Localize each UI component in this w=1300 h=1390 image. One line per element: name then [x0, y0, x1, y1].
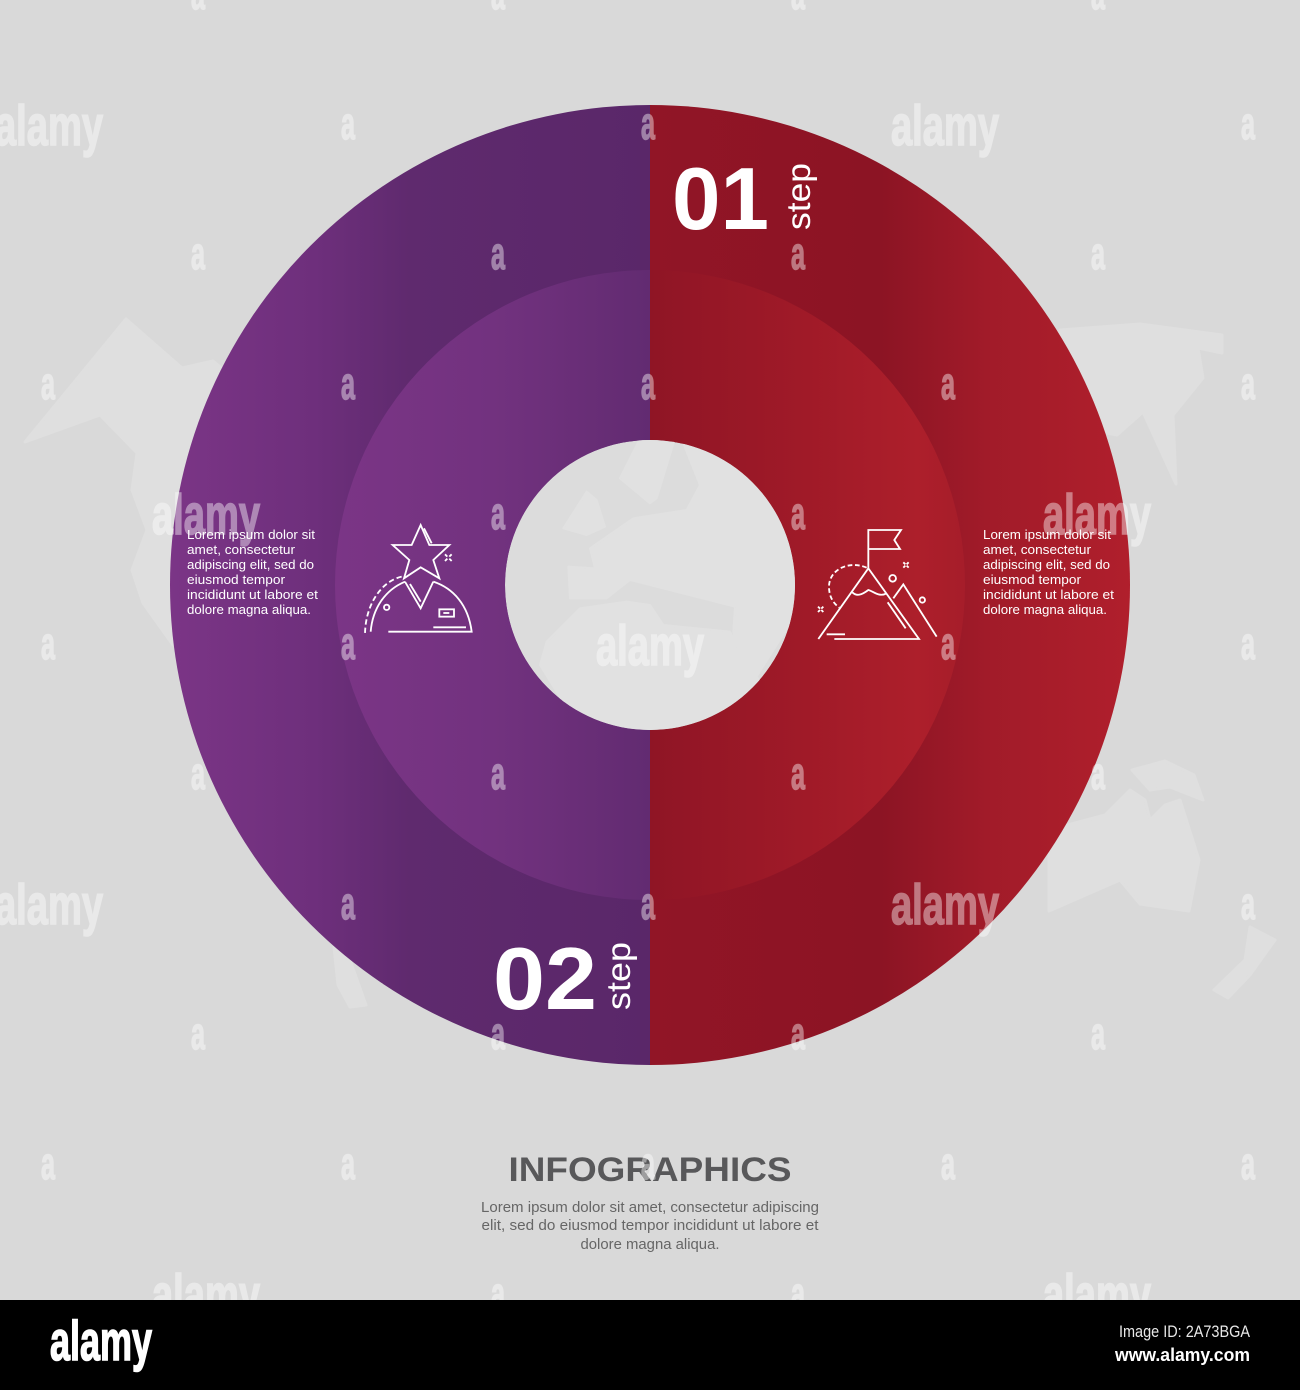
- watermark: small a marks: a: [191, 1008, 206, 1059]
- icon: star on dome: [365, 525, 472, 635]
- watermark: small a marks: a: [341, 1138, 356, 1189]
- segment 02: purple outer ring: [170, 105, 650, 1065]
- donut chart: [170, 105, 1130, 1065]
- watermark: small a marks: a: [791, 1268, 806, 1319]
- watermark: small a marks: a: [341, 618, 356, 669]
- watermark: large alamy marks: alamy: [891, 873, 999, 937]
- watermark: small a marks: a: [191, 748, 206, 799]
- text block: step 01: incididunt ut labore et: [983, 587, 1114, 602]
- footer url: www.alamy.com: [1114, 1345, 1250, 1365]
- watermark: small a marks: a: [641, 358, 656, 409]
- segment 01: red inner ring: [650, 270, 965, 900]
- text block: step 01: Lorem ipsum dolor sit: [983, 527, 1111, 542]
- watermark: large alamy marks: alamy: [152, 483, 260, 547]
- watermark: small a marks: a: [941, 358, 956, 409]
- text block: step 01: [983, 527, 1114, 617]
- description: [481, 1200, 819, 1253]
- watermark: large alamy marks: alamy: [1043, 483, 1151, 547]
- number 02: 02: [493, 929, 597, 1028]
- watermark: small a marks: a: [341, 358, 356, 409]
- description: dolore magna aliqua.: [580, 1237, 720, 1253]
- title: INFOGRAPHICS: [508, 1151, 792, 1189]
- watermark: small a marks: a: [491, 1268, 506, 1319]
- watermark: small a marks: a: [1241, 618, 1256, 669]
- watermark: small a marks: a: [1091, 1008, 1106, 1059]
- segment 01: red outer ring: [650, 105, 1130, 1065]
- text block: step 02: [187, 527, 318, 617]
- text block: step 01: adipiscing elit, sed do: [983, 557, 1110, 572]
- centre hole with map: [505, 435, 800, 735]
- text block: step 02: dolore magna aliqua.: [187, 602, 311, 617]
- segment 02: purple inner ring: [335, 270, 650, 900]
- watermark: small a marks: a: [1091, 228, 1106, 279]
- text block: step 02: amet, consectetur: [187, 542, 296, 557]
- watermark: large alamy marks: alamy: [1043, 1263, 1151, 1327]
- watermark: small a marks: a: [1241, 98, 1256, 149]
- watermark: small a marks: a: [1091, 748, 1106, 799]
- description: Lorem ipsum dolor sit amet, consectetur adipiscing: [481, 1200, 819, 1216]
- watermark: small a marks: a: [491, 228, 506, 279]
- word step: step: [780, 163, 817, 230]
- text block: step 01: amet, consectetur: [983, 542, 1092, 557]
- watermark: large alamy marks: alamy: [596, 614, 704, 678]
- text block: step 02: incididunt ut labore et: [187, 587, 318, 602]
- watermark: small a marks: a: [791, 748, 806, 799]
- watermark: small a marks: a: [491, 488, 506, 539]
- watermark: large alamy marks: [0, 94, 1151, 1327]
- text block: step 02: adipiscing elit, sed do: [187, 557, 314, 572]
- icon: mountain with flag: [818, 530, 937, 639]
- description: elit, sed do eiusmod tempor incididunt ut labore et: [482, 1218, 818, 1234]
- watermark: small a marks: a: [1241, 358, 1256, 409]
- watermark: small a marks: a: [1241, 878, 1256, 929]
- text block: step 02: eiusmod tempor: [187, 572, 286, 587]
- world map backdrop: [25, 319, 1275, 1007]
- watermark: small a marks: a: [491, 748, 506, 799]
- text block: step 02: Lorem ipsum dolor sit: [187, 527, 315, 542]
- text block: step 01: eiusmod tempor: [983, 572, 1082, 587]
- number 01: 01: [672, 149, 769, 248]
- footer logo: alamy: [50, 1309, 152, 1372]
- watermark: large alamy marks: alamy: [152, 1263, 260, 1327]
- watermark: small a marks: a: [641, 878, 656, 929]
- watermark: small a marks: a: [191, 228, 206, 279]
- watermark: small a marks: a: [941, 1138, 956, 1189]
- watermark: small a marks: a: [491, 1008, 506, 1059]
- word step: step: [600, 942, 637, 1010]
- footer image id: Image ID: 2A73BGA: [1119, 1322, 1251, 1341]
- watermark: small a marks: a: [791, 488, 806, 539]
- watermark: small a marks: a: [941, 618, 956, 669]
- watermark: small a marks: a: [41, 1138, 56, 1189]
- watermark: small a marks: a: [791, 228, 806, 279]
- watermark: large alamy marks: alamy: [891, 94, 999, 158]
- step 01 label: [672, 149, 817, 248]
- watermark: small a marks: a: [641, 98, 656, 149]
- watermark: small a marks: a: [1241, 1138, 1256, 1189]
- watermark: small a marks: a: [791, 1008, 806, 1059]
- watermark: small a marks: a: [41, 358, 56, 409]
- text block: step 01: dolore magna aliqua.: [983, 602, 1107, 617]
- watermark: small a marks: a: [641, 1138, 656, 1189]
- watermark: small a marks: a: [41, 618, 56, 669]
- step 02 label: [493, 929, 637, 1028]
- footer bar: [0, 1300, 1300, 1390]
- watermark: small a marks: a: [341, 98, 356, 149]
- watermark: small a marks: a: [341, 878, 356, 929]
